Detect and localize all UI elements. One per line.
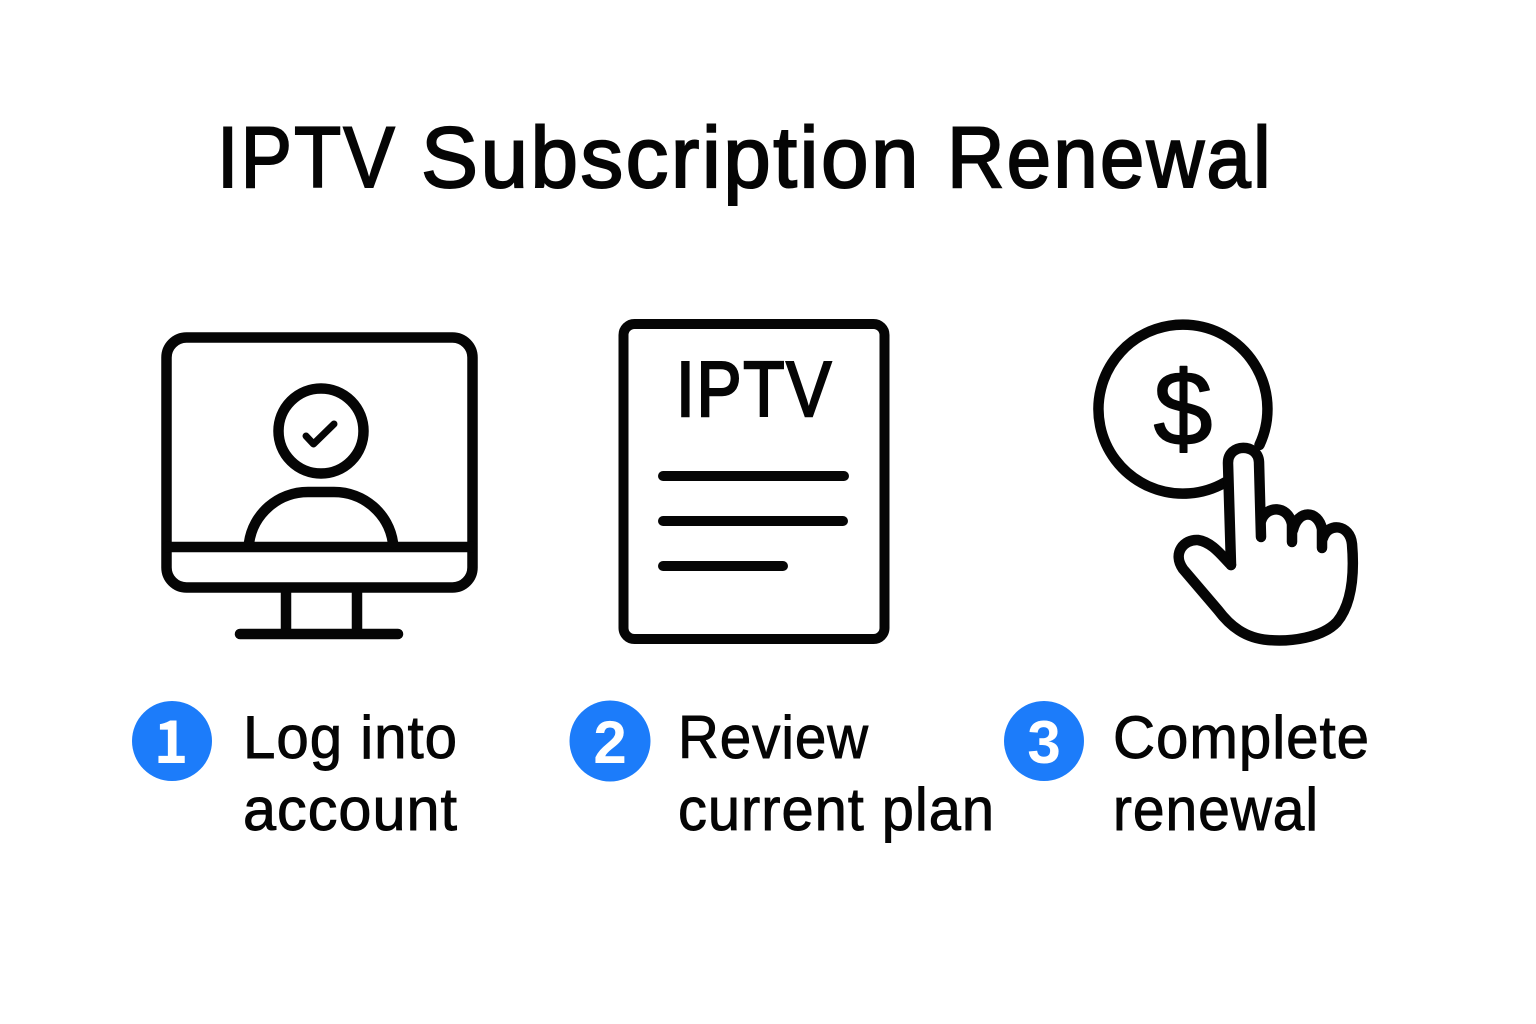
step 3 label: renewal [1113, 776, 1319, 843]
step 2 label: Review [678, 704, 869, 771]
step 3: coin and pointing hand icon: $ [1154, 350, 1212, 468]
step 2 number badge: 2 [593, 709, 627, 776]
step 2 label: current plan [678, 776, 995, 843]
step 1 number badge [132, 695, 212, 781]
step 1 label: Log into [243, 704, 458, 771]
step 2 number badge [570, 700, 650, 782]
step 1 label: account [243, 776, 458, 843]
step 1 number badge: 1 [154, 695, 188, 780]
step 2: document icon [624, 324, 884, 639]
step 3: coin and pointing hand icon [1098, 325, 1353, 640]
title: Subscription [421, 110, 921, 206]
title: IPTV [217, 110, 397, 206]
step 3 number badge: 3 [1027, 709, 1061, 776]
step 3 label: Complete [1113, 704, 1370, 771]
step 2: document icon: IPTV [676, 345, 833, 433]
step 1: monitor icon [166, 338, 472, 634]
title: Renewal [947, 110, 1273, 206]
step 3 number badge [1004, 701, 1084, 781]
